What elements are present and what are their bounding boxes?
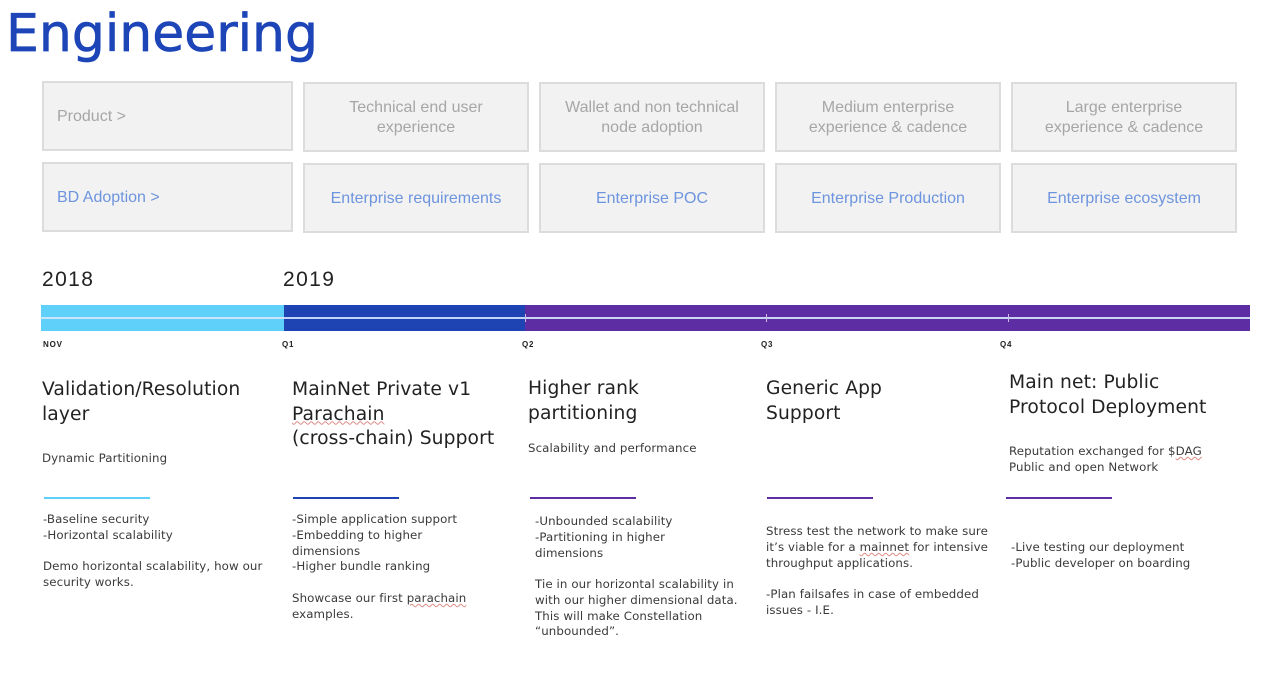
timeline label: Q2: Q2 — [522, 340, 534, 349]
column: mainnet private v1 — [292, 379, 494, 620]
box: large enterprise — [1011, 82, 1237, 152]
box: technical end user experience: experience — [377, 119, 455, 136]
column: validation/resolution layer — [42, 379, 262, 589]
box: large enterprise: Large enterprise — [1066, 99, 1182, 116]
details: -Baseline security -Horizontal scalability Demo horizontal scalability, how our security works. — [43, 512, 262, 589]
details: -Unbounded scalability -Partitioning in higher dimensions Tie in our horizontal scalability in with our higher dimensional data. This will make Constellation “unbounded”. — [535, 514, 738, 638]
box: enterprise requirements — [303, 163, 529, 233]
year label: 2019: 2019 — [283, 268, 335, 291]
box: enterprise ecosystem — [1011, 163, 1237, 233]
heading: Validation/Resolution layer — [42, 379, 240, 424]
subtitle: Dynamic Partitioning — [42, 451, 167, 465]
box: product row label — [42, 81, 293, 151]
subtitle: Scalability and performance — [528, 441, 697, 455]
segment: Q1 — [284, 305, 525, 331]
box: technical end user experience: Technical end user — [349, 99, 483, 116]
panel: roadmap boxes — [42, 81, 1237, 233]
box: enterprise production — [775, 163, 1001, 233]
timeline label: Q3: Q3 — [761, 340, 773, 349]
segment: 2018 — [41, 305, 284, 331]
box: wallet and non technical node adoption: node adoption — [601, 119, 703, 136]
box: technical end user experience — [303, 82, 529, 152]
box: BD adoption row label: BD Adoption > — [57, 189, 160, 206]
details: Stress test the network to make sure it’s viable for a mainnet for intensive throughput applications. -Plan failsafes in case of embedded issues - I.E. — [766, 524, 988, 617]
box: medium enterprise: Medium enterprise — [822, 99, 954, 116]
box: medium enterprise — [775, 82, 1001, 152]
title: Engineering — [6, 4, 318, 64]
column: higher rank partitioning — [528, 378, 738, 638]
box: enterprise POC: Enterprise POC — [596, 190, 708, 207]
heading: Main net: Public Protocol Deployment — [1009, 372, 1206, 418]
box: BD adoption row label — [42, 162, 293, 232]
heading: Generic App Support — [766, 378, 882, 424]
box: wallet and non technical node adoption — [539, 82, 765, 152]
box: enterprise requirements: Enterprise requirements — [331, 190, 501, 207]
timeline bar — [41, 305, 1250, 331]
box: large enterprise: experience & cadence — [1045, 119, 1203, 136]
divider — [44, 497, 150, 499]
details: -Simple application support -Embedding to higher dimensions -Higher bundle ranking Showcase our first parachain examples. — [292, 512, 466, 620]
segment: Q2 to Q4 — [525, 305, 1250, 331]
heading: Higher rank partitioning — [528, 378, 639, 424]
details: -Live testing our deployment -Public developer on boarding — [1011, 540, 1190, 570]
box: medium enterprise: experience & cadence — [809, 119, 967, 136]
box: enterprise ecosystem: Enterprise ecosystem — [1047, 190, 1201, 207]
column: generic app support — [766, 378, 988, 617]
timeline label: Q1: Q1 — [282, 340, 294, 349]
box: enterprise POC — [539, 163, 765, 233]
timeline label: NOV: NOV — [43, 340, 63, 349]
divider — [293, 497, 399, 499]
box: wallet and non technical node adoption: Wallet and non technical — [565, 99, 739, 116]
box: product row label: Product > — [57, 108, 126, 125]
heading: MainNet Private v1 Parachain (cross-chain) Support — [292, 379, 494, 449]
divider — [767, 497, 873, 499]
year label: 2018: 2018 — [42, 268, 94, 291]
subtitle: Reputation exchanged for $DAG Public and open Network — [1009, 444, 1202, 474]
divider — [1006, 497, 1112, 499]
column: main net public protocol deployment — [1006, 372, 1206, 570]
divider — [530, 497, 636, 499]
timeline label: Q4: Q4 — [1000, 340, 1012, 349]
box: enterprise production: Enterprise Production — [811, 190, 965, 207]
